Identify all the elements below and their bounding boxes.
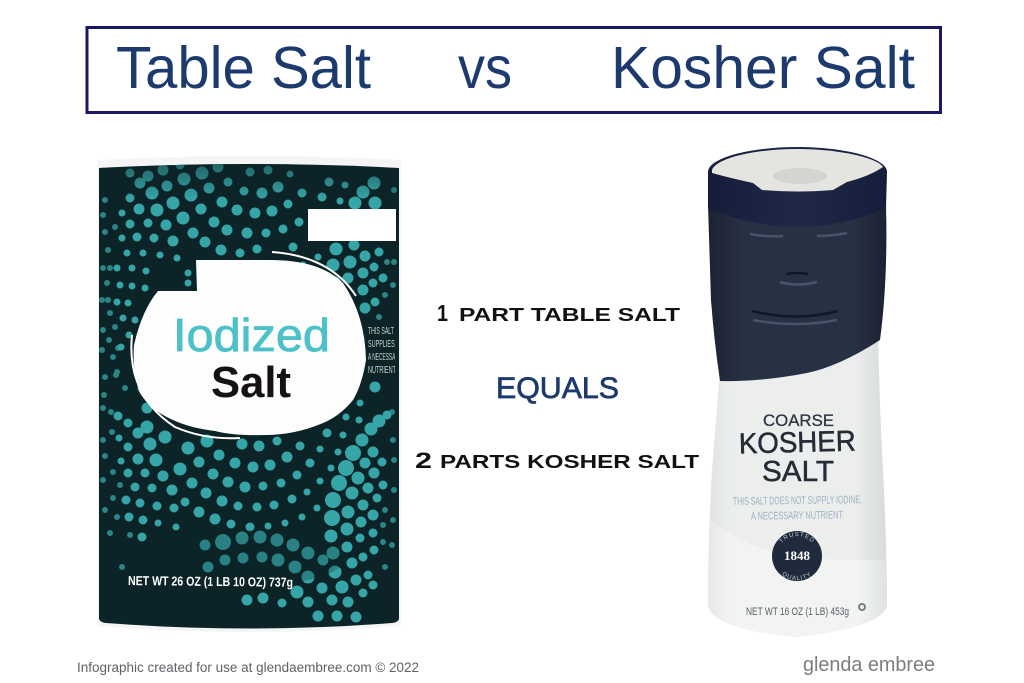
ratio: 2 parts kosher salt: PARTS KOSHER SALT — [440, 452, 699, 472]
white accent arcs — [131, 252, 356, 438]
text: A NECESSARY — [368, 352, 402, 363]
iodized table salt canister — [98, 156, 402, 632]
side nutrient note — [368, 327, 395, 373]
label: Salt: Salt — [211, 358, 291, 407]
cap top — [712, 149, 883, 192]
mini icon — [859, 604, 865, 610]
body ridges — [750, 233, 847, 324]
lower dot fade — [200, 530, 340, 582]
kosher salt bottle — [708, 147, 887, 637]
title: vs: vs — [458, 35, 512, 101]
top dot fade — [100, 164, 398, 196]
white price patch — [308, 209, 396, 241]
label blob — [134, 260, 366, 435]
salt fill — [708, 520, 887, 637]
kosher salt bottle: A NECESSARY NUTRIENT — [751, 509, 843, 523]
title box — [87, 28, 940, 112]
label: COARSE: COARSE — [763, 411, 834, 430]
dark body — [708, 205, 886, 381]
white lower body — [708, 335, 887, 637]
iodine note: THIS SALT DOES NOT SUPPLY IODINE, — [733, 494, 862, 508]
seal: trusted quality 1848: 1848 — [784, 548, 810, 563]
navy cap — [708, 147, 887, 227]
brand signature: glenda embree — [803, 654, 935, 676]
label: Iodized: Iodized — [173, 309, 330, 361]
title: Table Salt: Table Salt — [116, 35, 371, 101]
ratio: 1 part table salt: 1 — [437, 300, 448, 326]
label: KOSHER: KOSHER — [738, 425, 856, 461]
side nutrient note: NUTRIENT — [368, 365, 396, 376]
net weight: NET WT 26 OZ (1 LB 10 OZ) 737g — [128, 573, 293, 590]
side nutrient note: SUPPLIES IO — [368, 339, 402, 350]
side nutrient note: THIS SALT — [368, 326, 394, 337]
net weight: NET WT 16 OZ (1 LB) 453g — [746, 606, 849, 618]
ratio text — [415, 300, 699, 473]
ratio: 2 parts kosher salt: 2 — [415, 448, 432, 473]
footer credit: Infographic created for use at glendaembree.com © 2022 — [77, 660, 419, 675]
ratio: 1 part table salt: PART TABLE SALT — [459, 305, 680, 325]
cap recess — [773, 168, 827, 184]
label: SALT: SALT — [762, 456, 834, 488]
equals: EQUALS — [496, 372, 619, 405]
seal: trusted quality 1848 — [772, 531, 822, 581]
seal: trusted quality 1848: TRUSTED — [778, 532, 814, 542]
seal: trusted quality 1848: QUALITY — [782, 572, 810, 580]
title: Kosher Salt: Kosher Salt — [611, 35, 915, 101]
